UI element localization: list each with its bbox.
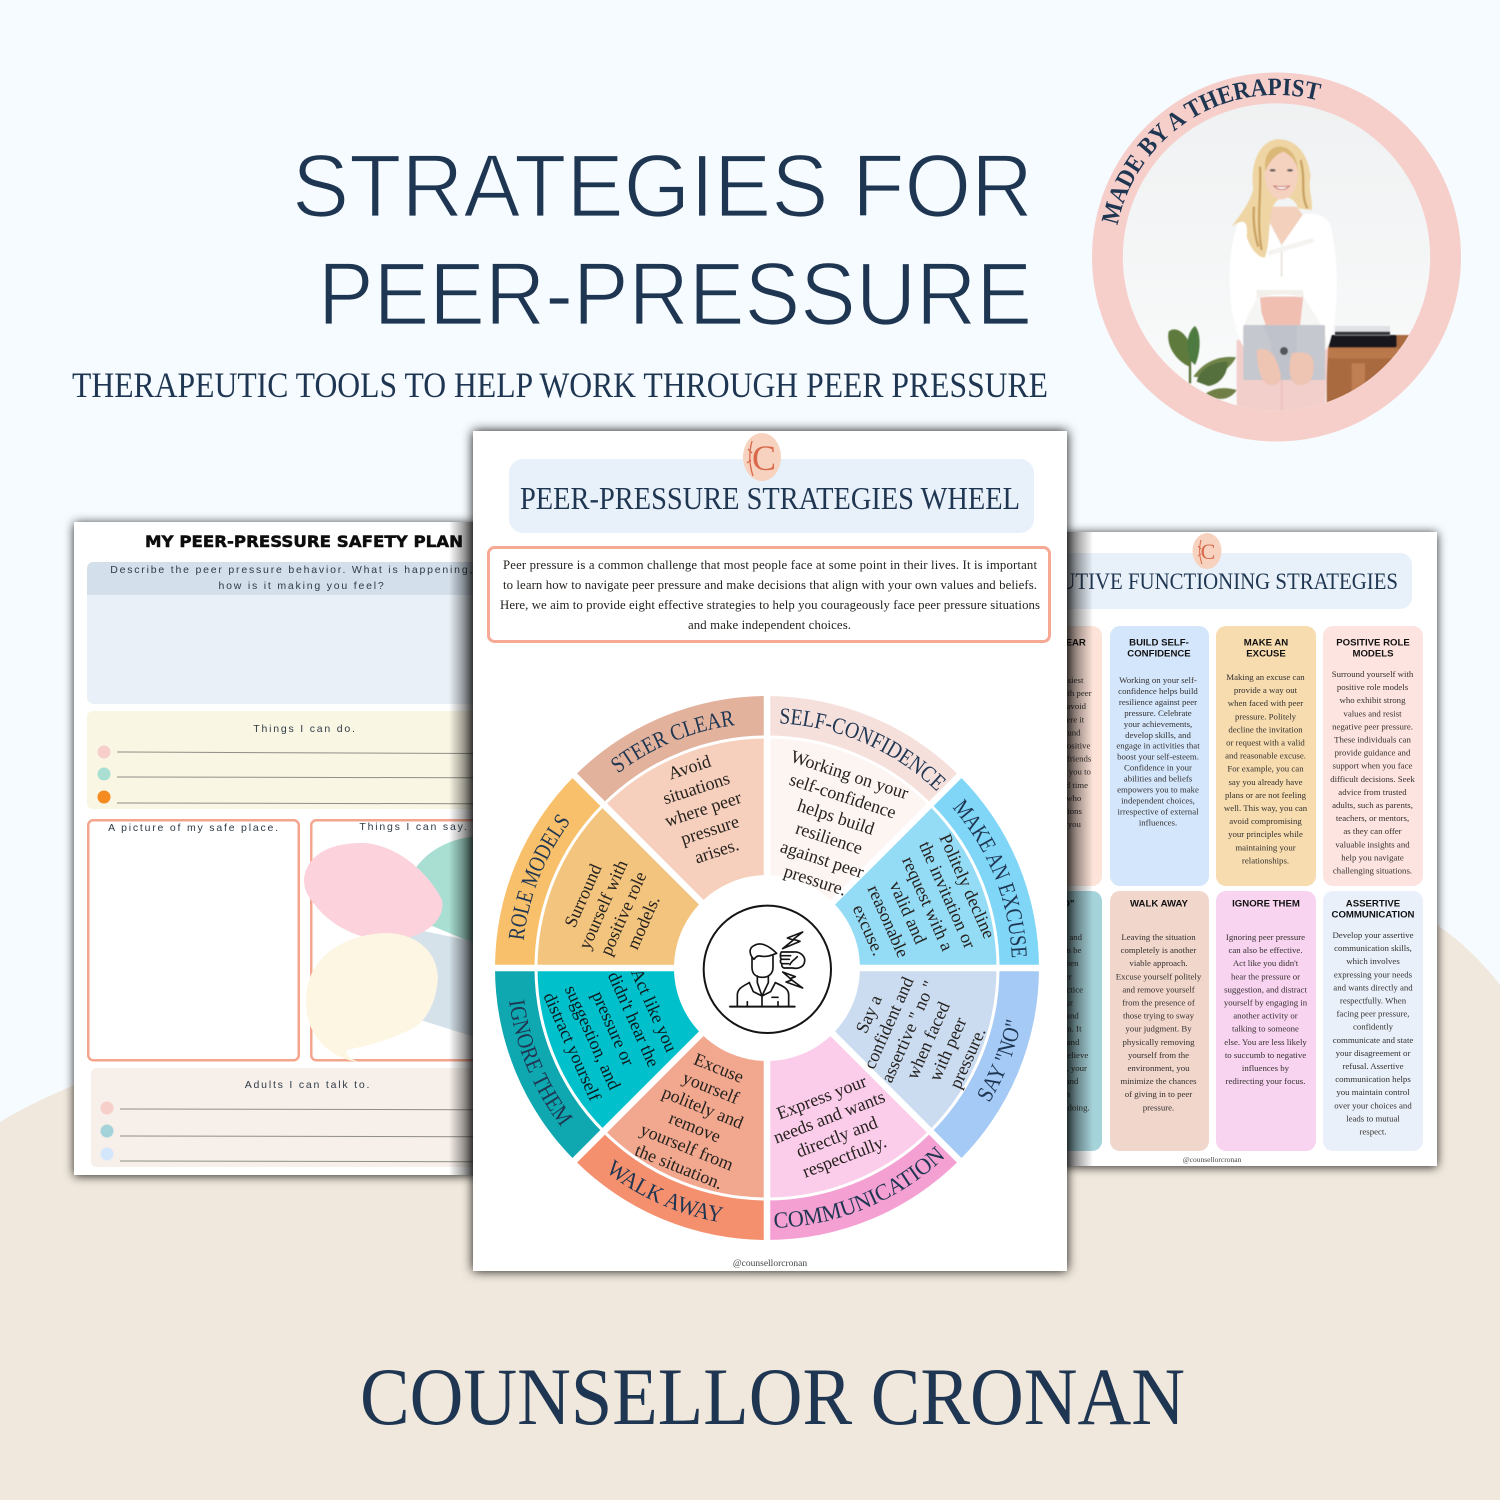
card: build self-confidence: Working on your self- bbox=[1119, 675, 1197, 685]
things I can do panel: Things I can do. bbox=[253, 723, 357, 735]
card: build self-confidence: develop skills, and bbox=[1125, 730, 1191, 740]
title: PEER-PRESSURE bbox=[318, 244, 1032, 344]
card: make an excuse: say you already have bbox=[1228, 777, 1303, 787]
ring label: steer clear: STEER CLEAR bbox=[611, 711, 735, 772]
card: say no: saying no can be bbox=[1023, 945, 1082, 955]
card: say no: self-worth bbox=[1034, 1089, 1071, 1099]
wedge text: walk away: remove bbox=[666, 1108, 724, 1146]
card: make an excuse: maintaining your bbox=[1235, 842, 1296, 852]
card: steer clear: arises. Surround bbox=[1023, 727, 1081, 737]
card: steer clear: STEER CLEAR bbox=[1018, 638, 1086, 648]
segment: ignore them bbox=[495, 968, 767, 1160]
strategies wheel bbox=[495, 696, 1039, 1240]
card: make an excuse: when faced with peer bbox=[1228, 698, 1303, 708]
left sheet paper bbox=[74, 522, 594, 1175]
segment: make an excuse bbox=[767, 776, 1039, 968]
card: walk away: pressure. bbox=[1143, 1102, 1174, 1112]
logo monogram: C bbox=[752, 438, 776, 478]
icon: person under pressure bbox=[704, 906, 831, 1033]
card: steer clear: One of the easiest bbox=[1021, 675, 1084, 685]
card: walk away bbox=[1110, 891, 1209, 1151]
beige hill background shape bbox=[0, 870, 1500, 1500]
wedge text: walk away: yourself from bbox=[638, 1119, 736, 1175]
card: walk away: environment, you bbox=[1127, 1063, 1190, 1073]
badge ring bbox=[1092, 72, 1461, 442]
card: positive role models: challenging situations. bbox=[1333, 866, 1412, 876]
segment: self-confidence bbox=[767, 696, 959, 968]
card: build self-confidence: BUILD SELF- bbox=[1129, 638, 1189, 648]
card: steer clear: with people who bbox=[1023, 793, 1082, 803]
card: assertive communication: communication skills, bbox=[1334, 943, 1412, 953]
card: assertive communication: ASSERTIVE bbox=[1346, 898, 1401, 910]
card: ignore them: yourself by engaging in bbox=[1224, 998, 1308, 1008]
card: assertive communication: facing peer pressure, bbox=[1336, 1009, 1410, 1019]
wedge text: make an excuse: Politely decline bbox=[935, 831, 999, 941]
title bbox=[292, 136, 1033, 344]
card: positive role models: teachers, or mentors, bbox=[1336, 813, 1409, 823]
adults I can talk to panel bbox=[91, 1068, 591, 1167]
wedge text: walk away: the situation. bbox=[632, 1140, 726, 1193]
wheel sheet heading band: PEER-PRESSURE STRATEGIES WHEEL bbox=[520, 480, 1020, 516]
card: ignore them: talking to someone bbox=[1232, 1024, 1299, 1034]
card: walk away: of giving in to peer bbox=[1125, 1089, 1192, 1099]
card: ignore them: redirecting your focus. bbox=[1226, 1076, 1305, 1086]
card: assertive communication: respect. bbox=[1359, 1126, 1387, 1136]
card: ignore them: hear the pressure or bbox=[1231, 971, 1300, 981]
card: ignore them: Ignoring peer pressure bbox=[1226, 932, 1305, 942]
ring label: communication: COMMUNICATION bbox=[774, 1146, 944, 1228]
ring label: self-confidence: SELF-CONFIDENCE bbox=[780, 708, 946, 791]
card: build self-confidence: Confidence in your bbox=[1124, 763, 1192, 773]
card: steer clear: and the way you bbox=[1023, 819, 1082, 829]
wedge text: self-confidence: self-confidence bbox=[787, 769, 899, 822]
ring label: walk away: WALK AWAY bbox=[610, 1159, 724, 1222]
card: build self-confidence: your achievements, bbox=[1124, 719, 1192, 729]
card: assertive communication: your disagreement or bbox=[1336, 1048, 1410, 1058]
card: ignore them bbox=[1216, 891, 1316, 1151]
card: walk away: WALK AWAY bbox=[1130, 898, 1189, 910]
card: say no: stand by them. It bbox=[1022, 1024, 1082, 1034]
segment: communication bbox=[767, 968, 959, 1240]
wedge text: self-confidence: pressure. bbox=[782, 861, 849, 900]
card: positive role models bbox=[1323, 626, 1423, 886]
card: positive role models: help you navigate bbox=[1341, 852, 1404, 862]
wedge text: say no: when faced bbox=[902, 999, 954, 1082]
card: positive role models: values and resist bbox=[1343, 708, 1402, 718]
card: positive role models: adults, such as parents, bbox=[1332, 800, 1413, 810]
card: positive role models: valuable insights and bbox=[1335, 839, 1410, 849]
badge: made by a therapist bbox=[1092, 72, 1461, 442]
card: walk away: Leaving the situation bbox=[1121, 932, 1196, 942]
safe place box: A picture of my safe place. bbox=[108, 822, 280, 834]
card: positive role models: difficult decisions. Seek bbox=[1330, 774, 1415, 784]
card: make an excuse bbox=[1216, 626, 1316, 886]
wedge text: role models: positive role bbox=[596, 869, 650, 958]
card: assertive communication: refusal. Assertive bbox=[1342, 1061, 1404, 1071]
card: make an excuse: relationships. bbox=[1242, 855, 1289, 865]
card: build self-confidence: CONFIDENCE bbox=[1127, 648, 1191, 660]
card: build self-confidence: independent choices, bbox=[1121, 795, 1195, 805]
intro text box bbox=[488, 548, 1050, 642]
card: positive role models: provide guidance and bbox=[1335, 748, 1411, 758]
ring label: ignore them: IGNORE THEM bbox=[509, 1000, 573, 1127]
card: build self-confidence: boost your self-esteem. bbox=[1117, 752, 1199, 762]
card: make an excuse: MAKE AN bbox=[1244, 638, 1288, 648]
shadows cast by centre sheet bbox=[449, 522, 1093, 1175]
card: ignore them: influences by bbox=[1242, 1063, 1290, 1073]
card: assertive communication: communication helps bbox=[1335, 1074, 1411, 1084]
card: make an excuse: pressure. Politely bbox=[1235, 711, 1297, 721]
things I can say box bbox=[304, 820, 591, 1062]
segment: role models bbox=[495, 776, 767, 968]
card: build self-confidence bbox=[1110, 626, 1209, 886]
card: say no: SAY "NO" bbox=[1030, 898, 1074, 910]
wheel sheet handle: @counsellorcronan bbox=[733, 1259, 807, 1269]
card: make an excuse: your principles while bbox=[1228, 829, 1303, 839]
card: build self-confidence: engage in activities that bbox=[1116, 741, 1200, 751]
card: build self-confidence: confidence helps build bbox=[1118, 686, 1198, 696]
card: make an excuse: avoid compromising bbox=[1229, 816, 1302, 826]
worksheet: executive functioning strategies bbox=[900, 532, 1437, 1166]
card: ignore them: else. You are less likely bbox=[1224, 1037, 1307, 1047]
card: say no: Be confident and bbox=[1022, 932, 1083, 942]
card: walk away: those trying to sway bbox=[1123, 1011, 1195, 1021]
ring label: make an excuse: MAKE AN EXCUSE bbox=[952, 798, 1027, 958]
things I can say box: Things I can say. bbox=[359, 821, 469, 833]
card: walk away: and remove yourself bbox=[1122, 984, 1195, 994]
card: say no: pressure. Practice bbox=[1021, 984, 1083, 994]
card: say no: in. Remember, your bbox=[1017, 1063, 1087, 1073]
card: positive role models: negative peer pressure. bbox=[1332, 721, 1413, 731]
card: positive role models: POSITIVE ROLE bbox=[1336, 638, 1410, 648]
wedge text: say no: confident and bbox=[859, 974, 918, 1072]
wedge text: say no: pressure. bbox=[945, 1024, 990, 1091]
ring label: role models: ROLE MODELS bbox=[508, 814, 569, 940]
wedge text: role models: Surround bbox=[560, 861, 606, 930]
intro text box: Peer pressure is a common challenge that most people face at some point in their lives. It is important bbox=[503, 558, 1037, 572]
card: walk away: viable approach. bbox=[1129, 958, 1188, 968]
wedge text: steer clear: where peer bbox=[662, 787, 744, 831]
subtitle: THERAPEUTIC TOOLS TO HELP WORK THROUGH PEER PRESSURE bbox=[72, 365, 1048, 405]
wedge text: make an excuse: reasonable bbox=[864, 882, 913, 960]
things I can do panel bbox=[87, 711, 587, 809]
wedge text: make an excuse: excuse. bbox=[849, 901, 889, 958]
card: positive role models: support when you face bbox=[1333, 761, 1413, 771]
curved badge text: MADE BY A THERAPIST bbox=[1102, 78, 1322, 226]
card: assertive communication: expressing your needs bbox=[1334, 969, 1413, 979]
wedge text: walk away: politely and bbox=[660, 1082, 746, 1133]
card: say no: powerful when bbox=[1025, 958, 1079, 968]
card: walk away: physically removing bbox=[1122, 1037, 1195, 1047]
wedge text: steer clear: pressure bbox=[678, 811, 741, 849]
wedge text: ignore them: didn't hear the bbox=[604, 968, 664, 1070]
wedge text: steer clear: Avoid bbox=[666, 751, 713, 783]
card: assertive communication: Develop your assertive bbox=[1332, 930, 1414, 940]
card: walk away: Excuse yourself politely bbox=[1116, 971, 1202, 981]
card: assertive communication: COMMUNICATION bbox=[1332, 910, 1415, 920]
card: build self-confidence: irrespective of external bbox=[1117, 806, 1199, 816]
right sheet logo bbox=[1192, 533, 1222, 569]
card: say no: facing peer bbox=[1032, 971, 1072, 981]
card: steer clear: respect decisions bbox=[1022, 806, 1082, 816]
card: positive role models: These individuals can bbox=[1334, 734, 1411, 744]
wedge text: ignore them: distract yourself bbox=[540, 989, 605, 1104]
card: make an excuse: plans or are not feeling bbox=[1225, 790, 1307, 800]
card: walk away: yourself from the bbox=[1128, 1050, 1189, 1060]
wedge text: say no: Say a bbox=[852, 992, 886, 1036]
card: steer clear: ways to deal with peer bbox=[1012, 688, 1092, 698]
card: assertive communication: confidently bbox=[1353, 1022, 1394, 1032]
card: assertive communication: you maintain control bbox=[1336, 1087, 1410, 1097]
card: build self-confidence: influences. bbox=[1139, 817, 1177, 827]
wedge text: communication: needs and wants bbox=[770, 1086, 888, 1147]
card: positive role models: as they can offer bbox=[1343, 826, 1402, 836]
card: assertive communication: and wants directly and bbox=[1333, 982, 1413, 992]
segment: walk away bbox=[575, 968, 767, 1240]
adults I can talk to panel: Adults I can talk to. bbox=[245, 1079, 371, 1091]
worksheet: my peer-pressure safety plan bbox=[74, 522, 594, 1175]
card: assertive communication: respectfully. When bbox=[1340, 996, 1407, 1006]
card: steer clear: and supportive friends bbox=[1013, 754, 1092, 764]
describe panel bbox=[87, 562, 587, 704]
card: positive role models: advice from trusted bbox=[1338, 787, 1407, 797]
card: steer clear: pressure is to avoid bbox=[1018, 701, 1087, 711]
card: assertive communication: which involves bbox=[1346, 956, 1400, 966]
card: ignore them: to succumb to negative bbox=[1225, 1050, 1306, 1060]
card: assertive communication: communicate and state bbox=[1333, 1035, 1413, 1045]
card: say no bbox=[1003, 891, 1102, 1151]
wedge text: say no: with peer bbox=[925, 1014, 970, 1084]
card: make an excuse: Making an excuse can bbox=[1226, 672, 1305, 682]
card: ignore them: can also be effective. bbox=[1228, 945, 1303, 955]
right sheet handle: @counsellorcronan bbox=[1183, 1155, 1242, 1164]
card: positive role models: Surround yourself with bbox=[1332, 669, 1414, 679]
card: build self-confidence: pressure. Celebrate bbox=[1124, 708, 1192, 718]
card: steer clear: situations where it bbox=[1020, 714, 1085, 724]
card: assertive communication: leads to mutual bbox=[1346, 1113, 1400, 1123]
wedge text: steer clear: situations bbox=[660, 768, 732, 808]
card: ignore them: IGNORE THEM bbox=[1232, 898, 1300, 910]
wedge text: walk away: yourself bbox=[680, 1067, 742, 1108]
card: steer clear: yourself with positive bbox=[1014, 740, 1090, 750]
safe place box bbox=[88, 820, 299, 1060]
wedge text: ignore them: pressure or bbox=[588, 988, 639, 1069]
wedge text: role models: yourself with bbox=[574, 857, 632, 952]
segment: steer clear bbox=[575, 696, 767, 968]
wedge text: make an excuse: the invitation or bbox=[915, 838, 980, 951]
speech bubbles bbox=[304, 836, 500, 1062]
card: build self-confidence: resilience against peer bbox=[1119, 697, 1197, 707]
card: say no: for what you believe bbox=[1016, 1050, 1088, 1060]
card: positive role models: who exhibit strong bbox=[1340, 695, 1406, 705]
therapist photo bbox=[1120, 100, 1433, 417]
wedge text: role models: models. bbox=[623, 893, 664, 952]
wedge text: ignore them: Act like you bbox=[627, 965, 681, 1055]
wedge text: make an excuse: request with a bbox=[898, 853, 958, 954]
card: positive role models: positive role models bbox=[1337, 682, 1409, 692]
card: walk away: completely is another bbox=[1121, 945, 1196, 955]
card: say no: is okay to stand bbox=[1025, 1037, 1080, 1047]
card: build self-confidence: empowers you to make bbox=[1117, 784, 1199, 794]
card: ignore them: Act like you didn't bbox=[1233, 958, 1299, 968]
worksheet: peer-pressure strategies wheel bbox=[464, 422, 1076, 1280]
describe panel: Describe the peer pressure behavior. What is happening, and bbox=[110, 564, 502, 576]
safety plan heading: MY PEER-PRESSURE SAFETY PLAN bbox=[145, 532, 463, 551]
ring label: say no: SAY "NO" bbox=[978, 1020, 1018, 1102]
card: steer clear: who encourage you to bbox=[1013, 767, 1092, 777]
card: make an excuse: and reasonable excuse. bbox=[1225, 751, 1306, 761]
card: make an excuse: EXCUSE bbox=[1246, 648, 1286, 660]
card: say no: well-being and bbox=[1026, 1076, 1079, 1086]
wedge text: walk away: Excuse bbox=[691, 1049, 747, 1087]
wedge text: self-confidence: helps build bbox=[795, 795, 877, 839]
card: assertive communication bbox=[1323, 891, 1423, 1151]
card: make an excuse: decline the invitation bbox=[1228, 724, 1303, 734]
right sheet heading band: EXECUTIVE FUNCTIONING STRATEGIES bbox=[1006, 569, 1398, 594]
card: steer clear bbox=[1003, 626, 1102, 886]
wheel sheet heading band bbox=[509, 459, 1034, 533]
logo monogram bbox=[743, 433, 781, 481]
card: say no: stating your bbox=[1031, 998, 1073, 1008]
wedge text: communication: respectfully. bbox=[800, 1131, 889, 1182]
wedge text: steer clear: arises. bbox=[692, 834, 741, 867]
card: make an excuse: well. This way, you can bbox=[1224, 803, 1308, 813]
right sheet heading band bbox=[920, 553, 1412, 609]
right sheet paper bbox=[900, 532, 1437, 1166]
card: walk away: from the presence of bbox=[1122, 998, 1195, 1008]
wedge text: ignore them: suggestion, and bbox=[561, 982, 625, 1093]
card: walk away: your judgment. By bbox=[1125, 1024, 1192, 1034]
card: ignore them: another activity or bbox=[1233, 1011, 1298, 1021]
card: say no: matter, always doing. bbox=[1014, 1102, 1090, 1112]
intro text box: to learn how to navigate peer pressure and make decisions that align with your own values and beliefs. bbox=[503, 578, 1037, 592]
describe panel: how is it making you feel? bbox=[218, 580, 386, 592]
card: ignore them: suggestion, and distract bbox=[1224, 984, 1307, 994]
card: make an excuse: provide a way out bbox=[1234, 685, 1298, 695]
segment: say no bbox=[767, 968, 1039, 1160]
wedge text: self-confidence: resilience bbox=[793, 818, 865, 858]
right sheet logo: C bbox=[1201, 539, 1215, 564]
intro text box: and make independent choices. bbox=[688, 618, 851, 632]
intro text box: Here, we aim to provide eight effective strategies to help you courageously face peer pressure situations bbox=[500, 598, 1040, 612]
card: make an excuse: For example, you can bbox=[1227, 764, 1304, 774]
wedge text: make an excuse: valid and bbox=[885, 878, 931, 947]
card: walk away: minimize the chances bbox=[1120, 1076, 1197, 1086]
wedge text: communication: directly and bbox=[793, 1112, 880, 1161]
centre sheet paper bbox=[473, 431, 1067, 1271]
wedge text: communication: Express your bbox=[774, 1071, 869, 1123]
card: positive role models: MODELS bbox=[1352, 648, 1394, 660]
card: make an excuse: or request with a valid bbox=[1226, 738, 1305, 748]
wedge text: say no: assertive " no " bbox=[877, 978, 939, 1086]
title: STRATEGIES FOR bbox=[292, 136, 1033, 236]
card: build self-confidence: abilities and beliefs bbox=[1124, 774, 1193, 784]
wedge text: self-confidence: against peer bbox=[778, 836, 866, 882]
card: steer clear: be yourself and time bbox=[1016, 780, 1088, 790]
card: assertive communication: over your choices and bbox=[1334, 1100, 1412, 1110]
brand name: COUNSELLOR CRONAN bbox=[360, 1351, 1185, 1442]
wedge text: self-confidence: Working on your bbox=[788, 746, 911, 803]
card: say no: boundaries and bbox=[1025, 1011, 1079, 1021]
